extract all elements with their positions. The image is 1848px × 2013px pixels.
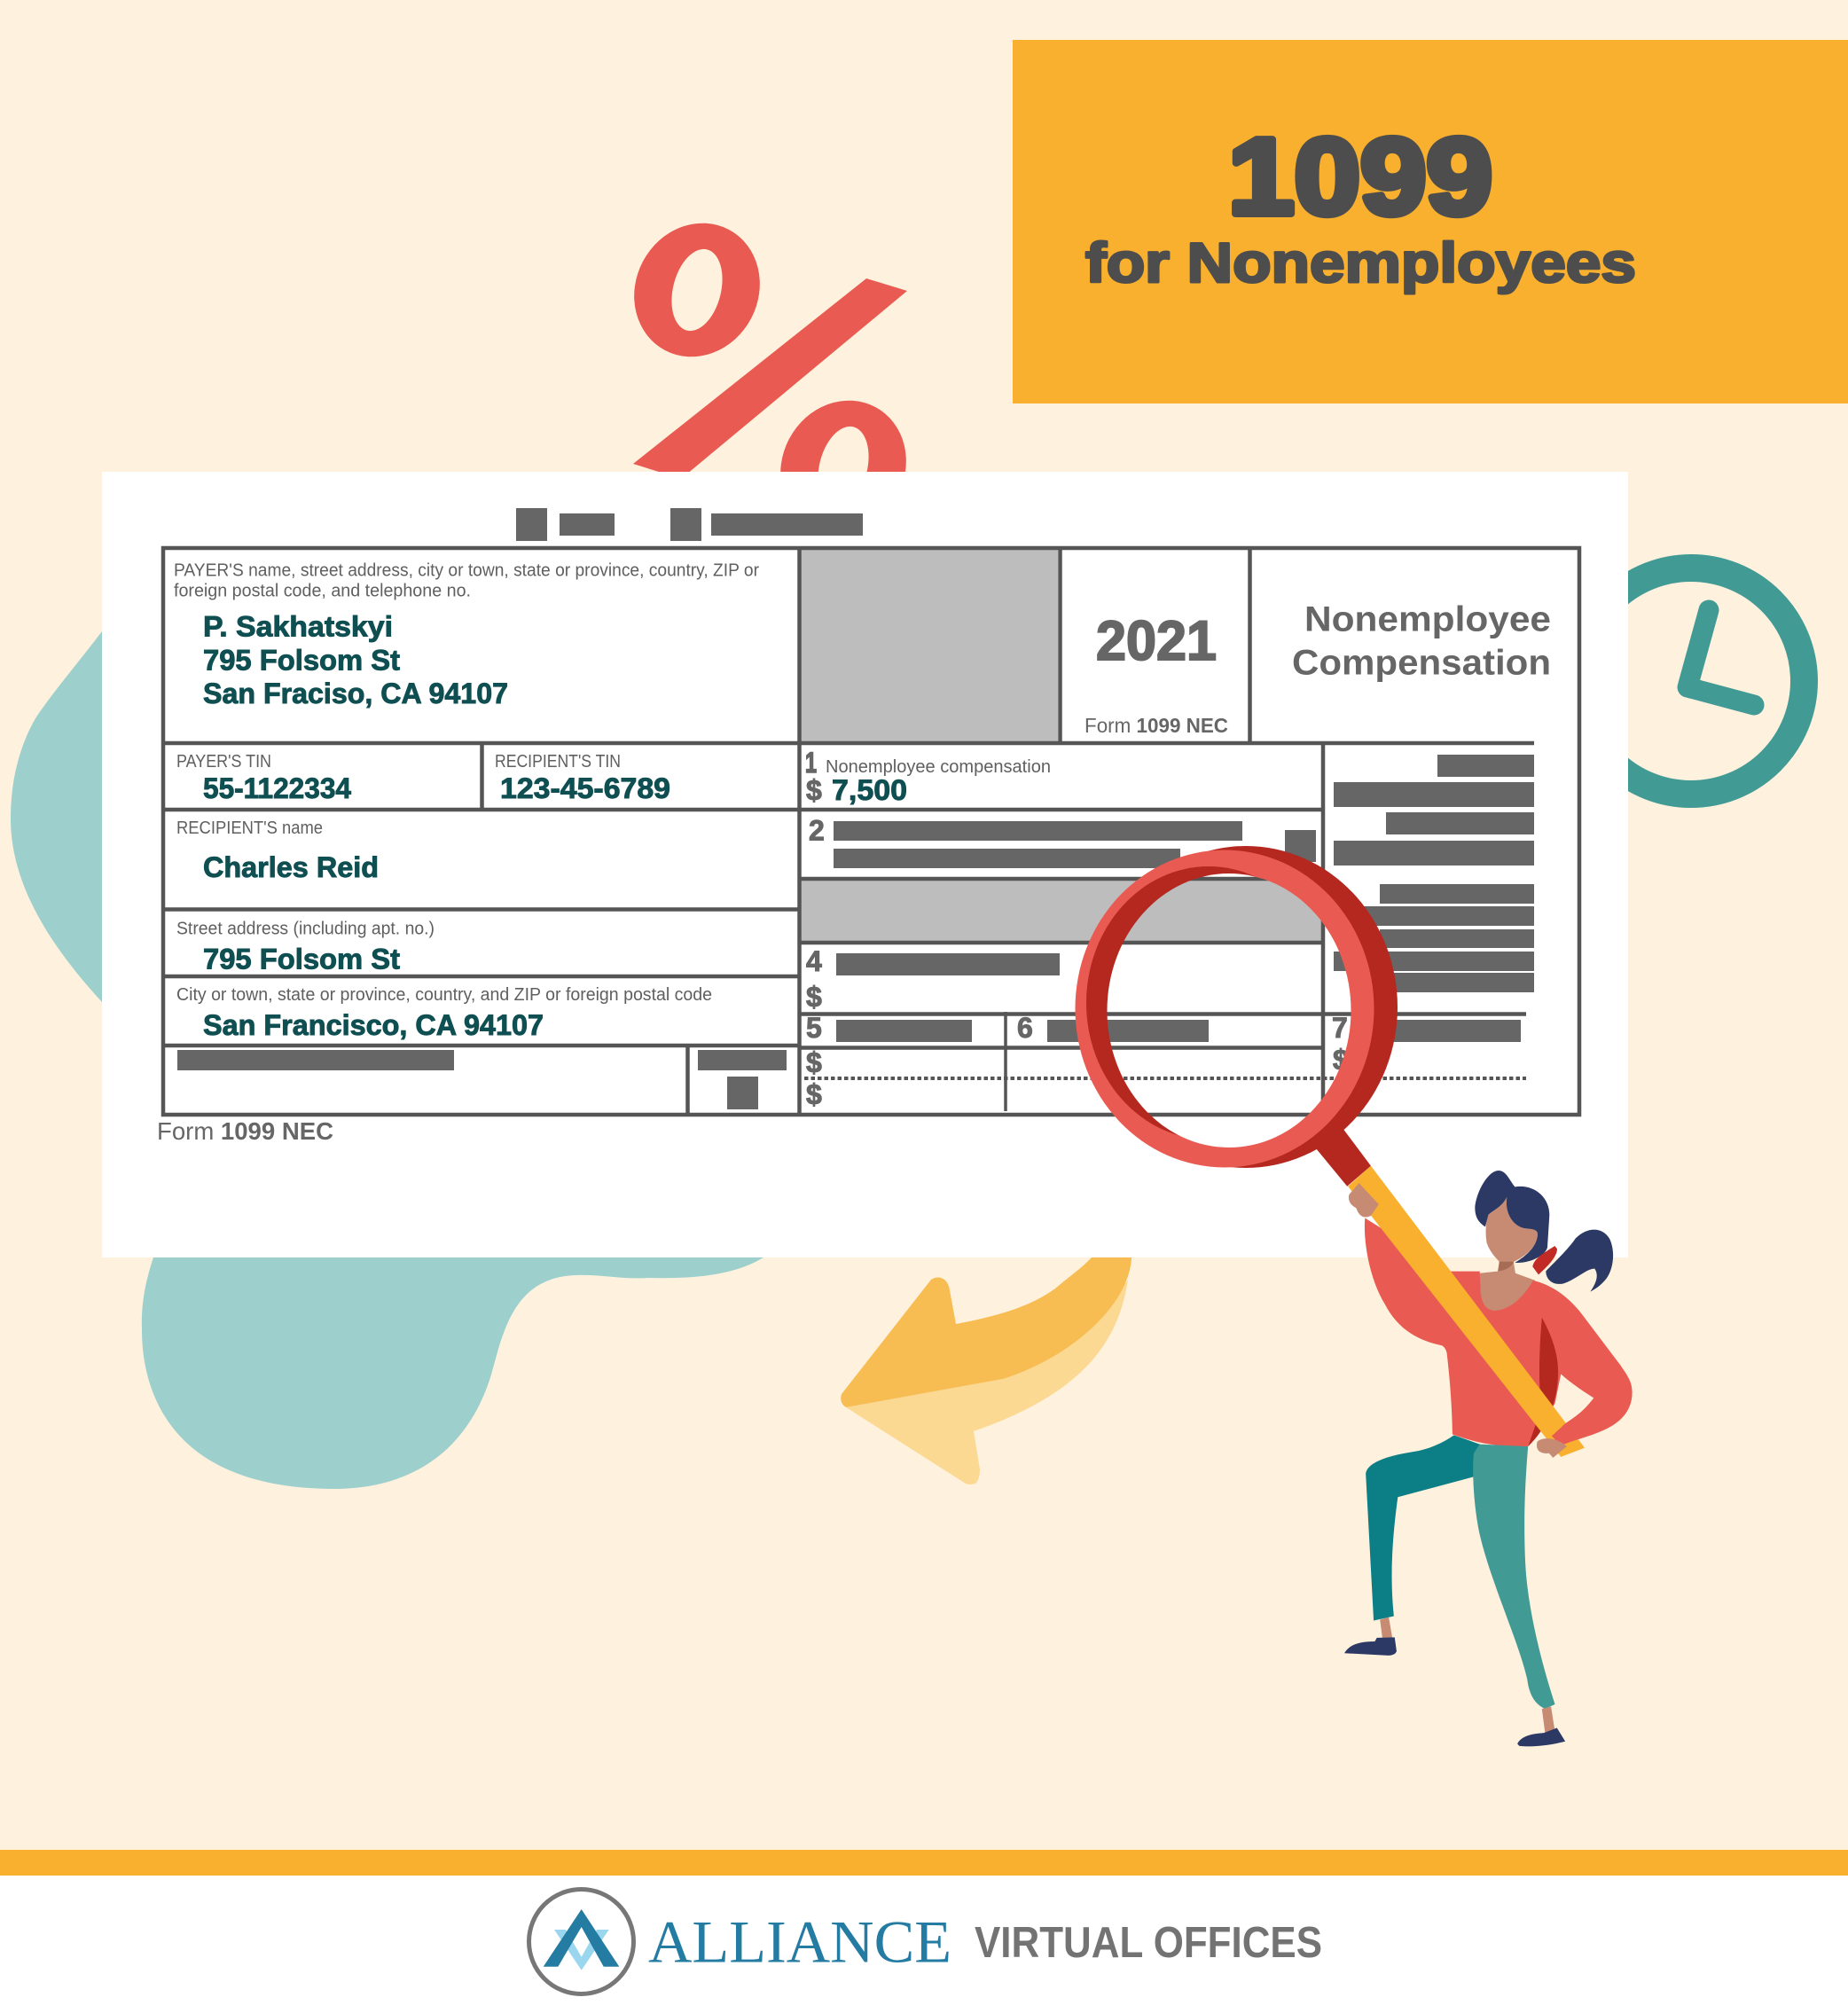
TIN block [176,752,670,804]
box 4: 4 [806,945,822,977]
magnifier handle neck [1315,1129,1371,1187]
boxes 5, 6, 7: $ [806,1046,822,1078]
neck and chest [1480,1261,1535,1311]
form footer label: Form 1099 NEC [157,1117,333,1145]
background blob: bottom [142,1241,763,1489]
footer bar [0,1850,1848,1876]
form title: Nonemployee [1304,599,1551,638]
boxes 5, 6, 7: $ [1333,1044,1349,1076]
hair [1475,1171,1549,1263]
body, handle and legs [1315,1129,1633,1746]
recipient block: Street address (including apt. no.) [176,919,435,938]
boxes 5, 6, 7 [806,1012,1521,1110]
TIN block: PAYER'S TIN [176,752,271,772]
woman holding magnifying glass [1315,1129,1633,1746]
TIN block: 123-45-6789 [500,772,670,804]
recipient block: City or town, state or province, country, and ZIP or foreign postal code [176,985,712,1005]
footer panel [0,1876,1848,2013]
TIN block: 55-1122334 [203,772,351,804]
logo wordmark: ALLIANCE [648,1908,951,1976]
form title: Compensation [1292,644,1551,683]
header redaction bars [516,508,863,541]
subtitle: for Nonemployees [1085,232,1636,294]
form year [1085,610,1228,737]
magnifier handle [1348,1166,1585,1457]
box 1: nonemployee compensation: 1 [805,747,817,779]
payer block: P. Sakhatskyi [203,610,393,642]
recipient block: San Francisco, CA 94107 [203,1009,544,1041]
box 4: $ [806,981,822,1013]
ankles [1380,1617,1555,1733]
boxes 5, 6, 7: $ [806,1078,822,1110]
form grid lines [163,548,1579,1115]
front leg [1473,1445,1555,1709]
boxes 5, 6, 7: 7 [1332,1012,1348,1044]
form year: Form 1099 NEC [1085,714,1228,737]
background blob: left [11,631,102,1002]
form year: 2021 [1096,610,1217,672]
right column redaction bars [1334,755,1534,992]
arrow: curved yellow [841,1257,1132,1484]
logo tagline: VIRTUAL OFFICES [975,1919,1322,1967]
recipient block: RECIPIENT'S name [176,819,323,838]
rear leg [1366,1435,1480,1621]
box 1: nonemployee compensation: 7,500 [832,774,907,806]
box 1: nonemployee compensation: $ [806,774,822,806]
head [1475,1171,1613,1292]
box 1: nonemployee compensation [805,747,1051,806]
neck shadow [1499,1262,1514,1271]
icon: percent sign [611,201,929,556]
box 2 [809,814,1316,868]
form title [1292,599,1551,683]
icon: clock [1578,568,1804,795]
title number: 1099: 1099 [1228,116,1492,237]
boxes 5, 6, 7: 5 [806,1012,822,1044]
face [1486,1197,1538,1262]
sweater [1365,1218,1633,1446]
payer block: San Fraciso, CA 94107 [203,678,508,709]
shaded cells [801,550,1323,941]
payer block: foreign postal code, and telephone no. [174,582,471,601]
scrunchie [1532,1246,1557,1274]
recipient block [176,819,712,1041]
recipient block: 795 Folsom St [203,944,400,975]
box 4 [806,945,1060,1013]
forearm [1552,1381,1633,1445]
boxes 5, 6, 7: 6 [1017,1012,1033,1044]
box 2: 2 [809,814,825,846]
form card [102,472,1628,1257]
box 1: nonemployee compensation: Nonemployee compensation [826,757,1051,777]
payer block [174,560,759,709]
recipient block: Charles Reid [203,851,379,883]
sweater shadow [1528,1318,1558,1446]
title banner [1013,40,1848,403]
hand: top [1349,1183,1379,1218]
bottom-left redaction bars [177,1050,787,1109]
logo mark [529,1889,633,1993]
payer block: 795 Folsom St [203,644,400,676]
ponytail [1546,1230,1613,1292]
hand: bottom [1537,1438,1567,1458]
payer block: PAYER'S name, street address, city or town, state or province, country, ZIP or [174,560,759,580]
shoes [1344,1637,1565,1746]
magnifying glass lens [1075,846,1398,1168]
TIN block: RECIPIENT'S TIN [495,752,621,772]
